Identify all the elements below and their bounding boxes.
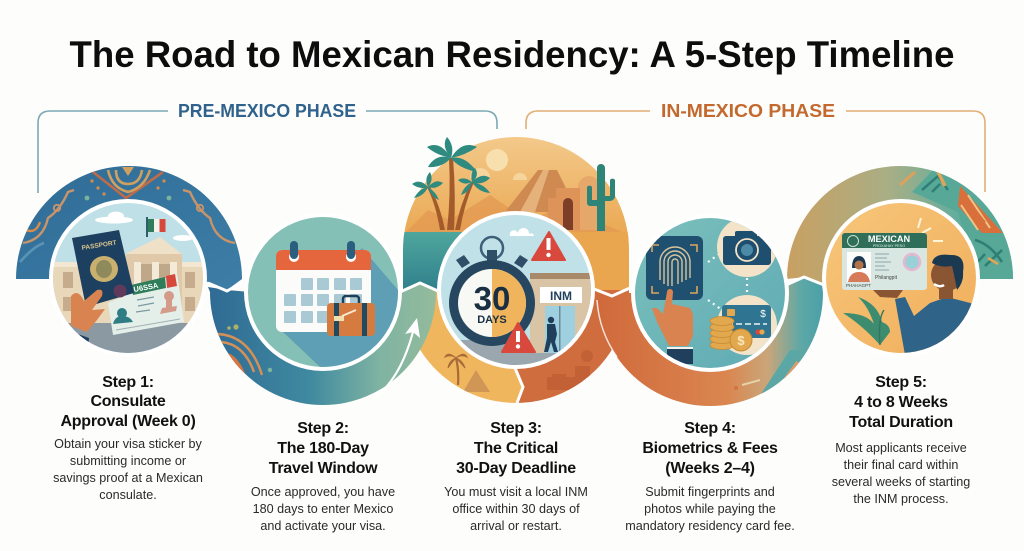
circle: step 3 stopwatch and INM office: 30 [474, 280, 510, 317]
circle: step 1 passport and visa: PASSPORT [81, 240, 117, 252]
circle: step 5 residency card and person: PROXAHAY PESO [873, 244, 905, 248]
step 2 text [251, 420, 395, 533]
phase bracket: pre-Mexico [38, 101, 497, 193]
step 3 text: 30-Day Deadline [456, 460, 576, 477]
step 3 text: The Critical [474, 440, 558, 457]
step 3 text: arrival or restart. [470, 519, 562, 533]
phase bracket: pre-Mexico: PRE-MEXICO PHASE [178, 101, 356, 121]
step 1 text: consulate. [99, 488, 157, 502]
circle: step 1 passport and visa [53, 203, 203, 355]
step 3 text: office within 30 days of [452, 502, 580, 516]
white rings around circles [49, 199, 980, 372]
arch: step 4 band [595, 277, 826, 406]
step 4 text: Submit fingerprints and [645, 485, 775, 499]
step 4 text: Step 4: [684, 420, 736, 437]
chevron dividers [208, 277, 824, 403]
step 4 text: (Weeks 2–4) [665, 460, 755, 477]
step 2 text: 180 days to enter Mexico [253, 502, 393, 516]
phase bracket: in-Mexico [526, 101, 985, 192]
step 1 text [53, 374, 203, 502]
arch: step 2 band [208, 283, 436, 405]
step 1 text: Consulate [90, 393, 166, 410]
step 1 text: Approval (Week 0) [60, 413, 196, 430]
step 5 text: several weeks of starting [832, 475, 970, 489]
circle: step 5 residency card and person [826, 203, 978, 355]
circle: step 2 calendar and suitcase [248, 217, 398, 367]
palms and cactus rising above the arch [412, 137, 615, 231]
step 5 text: their final card within [844, 458, 958, 472]
step 2 text: Step 2: [297, 420, 349, 437]
step 1 text: submitting income or [70, 454, 186, 468]
step 1 text: Obtain your visa sticker by [54, 437, 203, 451]
step 1 text: Step 1: [102, 374, 154, 391]
step 1 text: savings proof at a Mexican [53, 471, 203, 485]
title: The Road to Mexican Residency: A 5-Step Timeline [70, 34, 954, 75]
circle: step 1 passport and visa: U6SSA [133, 281, 160, 294]
step 5 text: the INM process. [853, 492, 949, 506]
step 5 text: 4 to 8 Weeks [854, 394, 948, 411]
arch: step 1 [16, 166, 242, 290]
step 2 text: and activate your visa. [260, 519, 386, 533]
step 3 text [444, 420, 588, 533]
circle: step 3 stopwatch and INM office [441, 215, 592, 365]
circle: step 3 stopwatch and INM office: INM [550, 289, 572, 303]
circle: step 5 residency card and person: PHAHAGPT [846, 283, 871, 288]
step 4 text [625, 420, 795, 533]
phase bracket: in-Mexico: IN-MEXICO PHASE [661, 101, 835, 121]
step 2 text: The 180-Day [277, 440, 369, 457]
step 4 text: photos while paying the [644, 502, 776, 516]
circle: step 4 biometrics and fees: $ [760, 309, 766, 320]
step 3 text: Step 3: [490, 420, 542, 437]
step 3 text: You must visit a local INM [444, 485, 588, 499]
circle: step 4 biometrics and fees: $ [737, 333, 745, 348]
step 5 text [832, 374, 970, 506]
arch: step 3 blob [403, 137, 629, 404]
step 5 text: Step 5: [875, 374, 927, 391]
circle: step 3 stopwatch and INM office: DAYS [477, 314, 507, 326]
arch: step 5 [787, 166, 1013, 285]
circle: step 4 biometrics and fees [635, 217, 785, 368]
step 2 text: Travel Window [269, 460, 378, 477]
step 4 text: mandatory residency card fee. [625, 519, 795, 533]
step 5 text: Total Duration [849, 414, 953, 431]
circle: step 5 residency card and person: Philangpit [875, 275, 898, 281]
step 5 text: Most applicants receive [835, 441, 967, 455]
step 2 text: Once approved, you have [251, 485, 395, 499]
circle: step 5 residency card and person: MEXICAN [868, 234, 911, 244]
step 4 text: Biometrics & Fees [642, 440, 778, 457]
